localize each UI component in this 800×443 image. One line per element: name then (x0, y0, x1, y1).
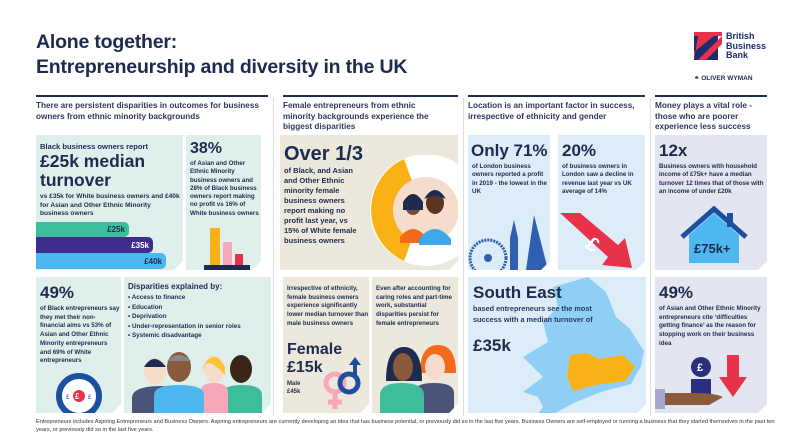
icon: map of england and wales (523, 277, 644, 413)
logo: British Business Bank: Bank (726, 50, 748, 60)
icon: target with pounds: £ (66, 395, 70, 401)
panel: female turnover: Irrespective of ethnicity, female business owners experience significantly lower median turnover than male business owners (287, 285, 368, 327)
icon: red down arrow with pound: £ (581, 233, 603, 257)
icon: two women (380, 345, 456, 413)
panel: median turnover: turnover (40, 170, 111, 190)
logo: British Business Bank: ⚭ OLIVER WYMAN (694, 75, 753, 82)
panel: south east map (468, 277, 646, 413)
icon: gender symbols (324, 357, 361, 409)
panel: only 71% london: Only 71% (471, 141, 548, 160)
footer note: Entrepreneurs includes Aspiring Entrepreneurs and Business Owners. Aspiring entrepreneurs are currently developing an idea that has business potential, or previously did so in the last five years. Business Owners are self-employed or running a business that they started themselves in the past ten years, or previously did so in the last five years. (36, 419, 774, 433)
panel: 12x: Business owners with household income of £75k+ have a median turnover 12 times that of those with an income of under £20k (659, 163, 764, 195)
logo: British Business Bank: British (726, 31, 755, 41)
icon: group of four people (132, 352, 262, 413)
panel: 49% finance difficulties: of Asian and Other Ethnic Minority entrepreneurs cite ‘difficulties getting finance’ as the reason for stopping work on their business idea (659, 305, 761, 347)
panel: disparities explained (124, 277, 271, 413)
panel: median turnover: vs £35k for White business owners and £40k for Asian and Other Ethnic Minority business owners (40, 193, 180, 217)
panel: disparities explained: • Deprivation (128, 313, 167, 320)
panel: only 71% london: of London business owners reported a profit in 2019 - the lowest in the UK (472, 163, 547, 195)
panel: 20% decline: 20% (562, 141, 596, 160)
bar chart: £25k (107, 225, 125, 234)
panel: south east map: based entrepreneurs see the most success with a median turnover of (473, 304, 593, 324)
panel: 49% finance difficulties (655, 277, 767, 413)
heading: col2: Female entrepreneurs from ethnic minority backgrounds experience the biggest disparities (283, 101, 429, 131)
title (36, 31, 408, 78)
icon: london skyline (468, 215, 546, 270)
icon: bar columns (204, 228, 250, 270)
panel: 20% decline: of business owners in London saw a decline in revenue last year vs UK average of 14% (562, 163, 634, 195)
heading: col4: Money plays a vital role - those who are poorer experience less success (655, 101, 752, 131)
bar chart: £40k (144, 257, 162, 266)
icon: donut with two women (370, 155, 458, 266)
icon: target with pounds: £ (88, 395, 92, 401)
icon: target with pounds (56, 373, 102, 413)
panel: 12x (655, 135, 767, 270)
panel: female turnover: Female (287, 341, 342, 358)
panel: 49% black entrepreneurs: of Black entrepreneurs say they met their non-financial aims vs 53% of Asian and Other Ethnic Minority entrepreneurs and 69% of White entrepreneurs (40, 305, 119, 364)
icon: red down arrow with pound (560, 213, 632, 268)
panel: over 1/3 (280, 135, 458, 270)
heading: col1: There are persistent disparities in outcomes for business owners from ethnic minority backgrounds (36, 101, 259, 120)
panel: disparities explained: • Education (128, 304, 162, 310)
panel: disparities explained: • Under-representation in senior roles (128, 322, 241, 330)
title: Alone together: (36, 31, 177, 53)
panel: median turnover: Black business owners report (40, 142, 148, 151)
icon: target with pounds: £ (75, 392, 80, 401)
panel: over 1/3: of Black, and Asian and Other Ethnic minority female business owners report making no profit last year, vs 15% of White female business owners (284, 166, 357, 245)
panel: median turnover (36, 135, 183, 270)
panel: 38% no profit: of Asian and Other Ethnic Minority business owners and 28% of Black business owners report making no profit vs 16% of White business owners (190, 160, 259, 217)
panel: south east map: South East (473, 283, 562, 302)
panel: median turnover: £25k median (40, 151, 145, 171)
panel: 20% decline (558, 135, 645, 270)
panel: caring roles (372, 277, 458, 413)
panel: over 1/3: Over 1/3 (284, 143, 363, 165)
icon: house £75k+: £75k+ (694, 241, 731, 256)
bar chart: £35k (131, 241, 149, 250)
bar chart (36, 222, 166, 269)
panel: 38% no profit (186, 135, 261, 270)
icon: hand with coin and down arrow (655, 355, 747, 409)
icon: house £75k+ (680, 206, 748, 263)
title: Entrepreneurship and diversity in the UK (36, 56, 407, 78)
logo: British Business Bank (694, 31, 766, 82)
panel: south east map: £35k (473, 336, 511, 355)
logo: British Business Bank: Business (726, 40, 766, 50)
panel: only 71% london (468, 135, 550, 270)
panel: caring roles: Even after accounting for caring roles and part-time work, substantial disparities persist for female entrepreneurs (376, 285, 452, 327)
panel: female turnover: £45k (287, 389, 300, 395)
heading: col3: Location is an important factor in success, irrespective of ethnicity and gender (468, 101, 635, 120)
panel: female turnover: £15k (287, 359, 323, 376)
panel: 12x: 12x (659, 141, 687, 160)
panel: disparities explained: • Systemic disadvantage (128, 332, 202, 339)
panel: disparities explained: Disparities explained by: (128, 282, 222, 291)
panel: 49% black entrepreneurs: 49% (40, 283, 74, 302)
panel: 49% finance difficulties: 49% (659, 283, 693, 302)
panel: female turnover (283, 277, 369, 413)
panel: female turnover: Male (287, 381, 300, 387)
icon: hand with coin and down arrow: £ (697, 362, 703, 374)
panel: 38% no profit: 38% (190, 140, 222, 157)
panel: 49% black entrepreneurs (36, 277, 121, 413)
panel: disparities explained: • Access to finance (128, 294, 185, 301)
